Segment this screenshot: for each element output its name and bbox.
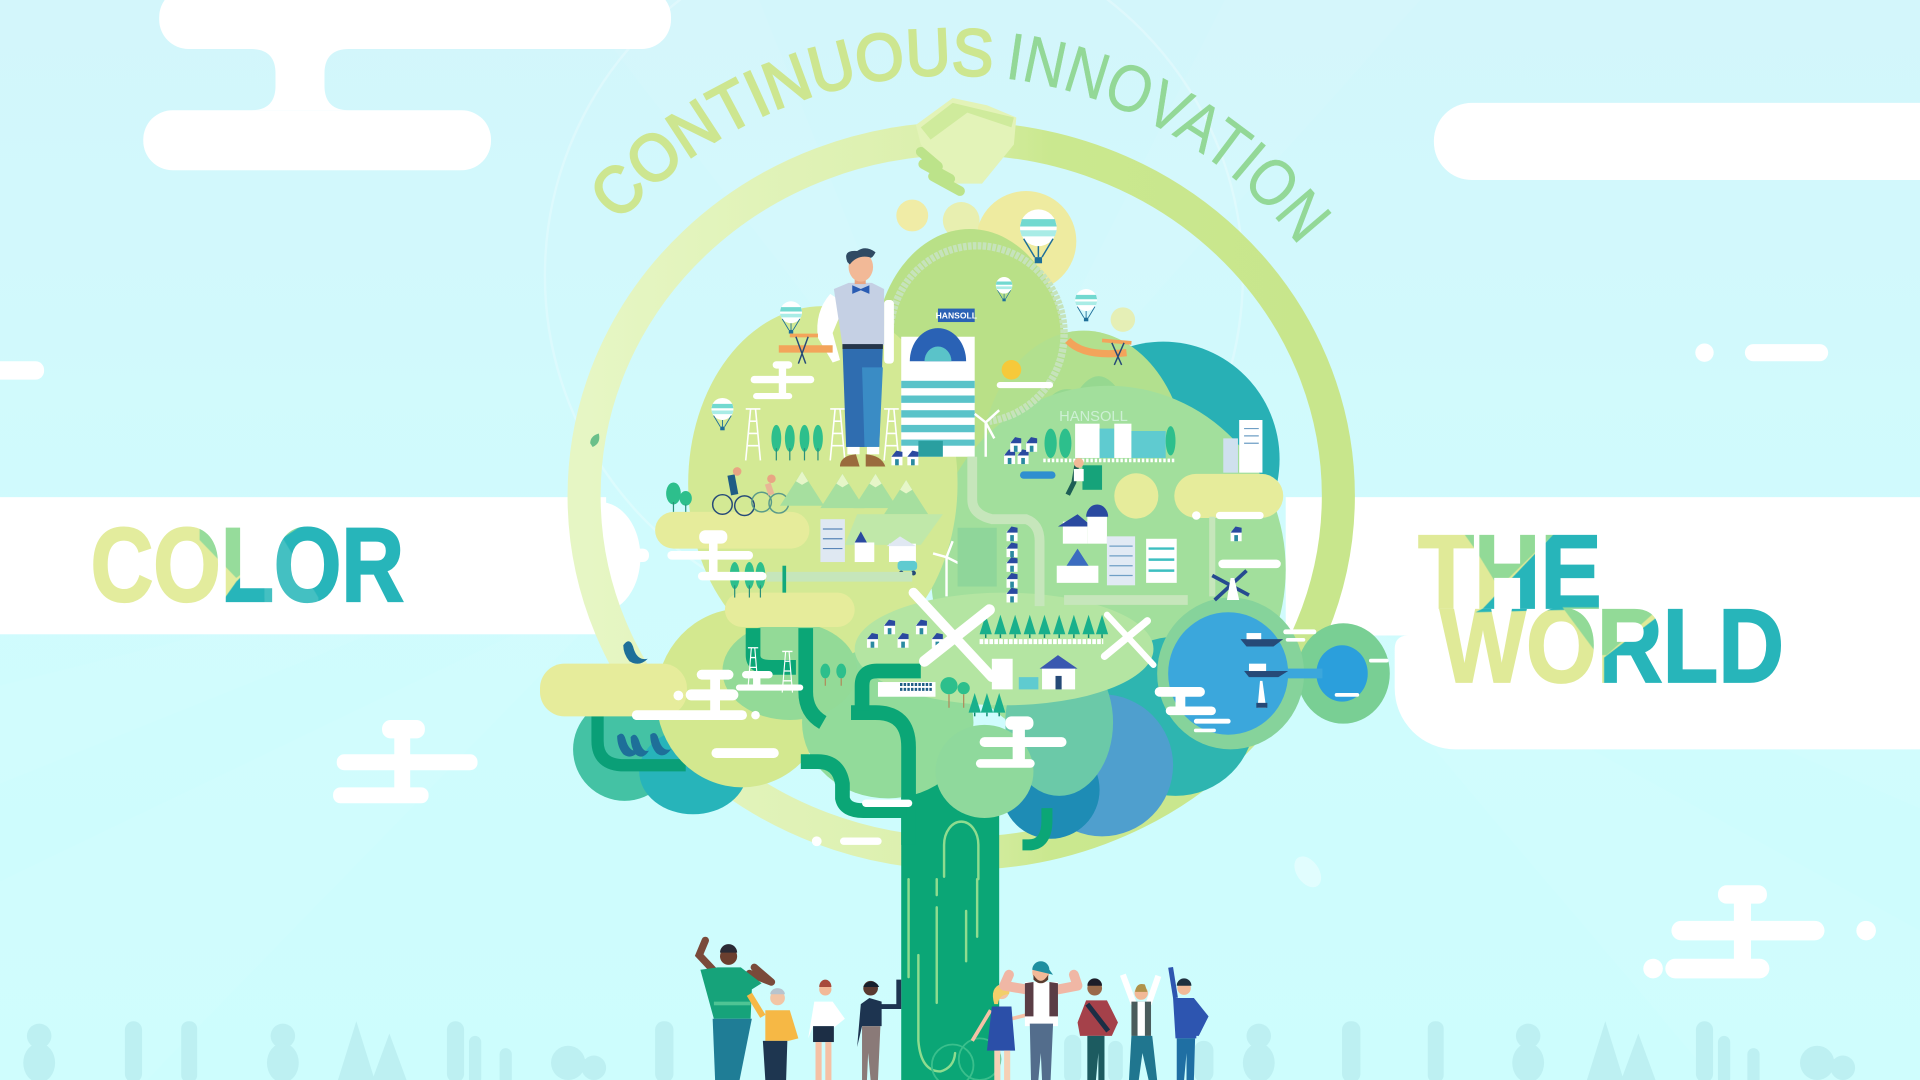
front green lobe [936, 725, 1033, 818]
wind turbines [933, 410, 999, 596]
car [898, 561, 917, 576]
cloud: lower right [1643, 885, 1876, 978]
blue pond [1020, 471, 1056, 479]
icon: handshake [916, 98, 1016, 191]
curved title: continuous innovation [594, 28, 1332, 243]
central right green mass [931, 386, 1286, 753]
sky circles [896, 191, 1135, 332]
pine forest [969, 615, 1108, 716]
road ring [890, 246, 1064, 421]
lower blue lobes [1002, 637, 1255, 839]
factory with hansoll sign [1043, 409, 1176, 460]
mountains [780, 471, 928, 514]
cloud: top left [143, 0, 671, 170]
balloons [711, 209, 1097, 430]
white band right [1286, 497, 1920, 749]
icon: hansoll tower: HANSOLL [936, 310, 977, 320]
person: woman with dark top [857, 980, 899, 1080]
small houses [867, 437, 1242, 648]
title: THE WORLD [1418, 514, 1784, 705]
person on bench [1068, 458, 1102, 495]
lower centre lobes [802, 647, 1113, 798]
mid left lobe [722, 622, 857, 720]
creatures in lobe [617, 733, 671, 757]
mansion and houses [992, 655, 1078, 689]
roads [767, 457, 1212, 606]
lower towers [748, 648, 792, 693]
branches [753, 628, 1047, 845]
factory low [878, 682, 936, 697]
person: man in red jacket [1078, 978, 1118, 1080]
icon: towers [746, 409, 899, 460]
curved title: continuous innovation: INNOVATION [1010, 34, 1332, 243]
ship and lighthouse [1240, 633, 1288, 708]
title: COLOR: COLOR [91, 507, 404, 624]
white fence [980, 640, 1103, 644]
person: woman in blue dress [972, 984, 1031, 1080]
tree trunk [901, 784, 1000, 1080]
creature on ring [623, 641, 648, 664]
lower left pale lobe [656, 609, 828, 787]
peach hill [707, 365, 824, 492]
ring of cooperation [584, 138, 1338, 853]
teal hill [1047, 342, 1280, 577]
white canopy clouds [632, 360, 1389, 846]
icon: hansoll tower [901, 309, 977, 457]
buildings group left [820, 519, 916, 562]
person: man arms raised [1123, 975, 1158, 1080]
right hill [980, 331, 1188, 612]
person: man in blue jacket [1171, 967, 1209, 1080]
windmill [1212, 571, 1249, 600]
pale yellow foliage [540, 473, 1283, 716]
distant forest silhouettes [23, 1021, 1855, 1080]
central pale lobe [855, 593, 1153, 705]
factory with hansoll sign: HANSOLL [1059, 409, 1128, 425]
lake [1157, 598, 1390, 749]
people group [699, 940, 1209, 1080]
cloud: small right [1695, 343, 1828, 362]
white band left [0, 497, 649, 634]
character: man in bow tie [817, 248, 894, 467]
round trees near cyclists [666, 482, 692, 512]
faint sparkle [1289, 851, 1327, 892]
title: THE WORLD: THE [1418, 514, 1602, 631]
white airplanes [913, 593, 1153, 677]
icon: orange biplanes [779, 336, 1131, 365]
left hill [688, 306, 958, 661]
cyclists [713, 467, 789, 516]
far left lobes [573, 698, 747, 814]
cloud: lower left [333, 720, 478, 803]
leaf [590, 433, 599, 447]
city buildings [1223, 420, 1262, 473]
person: strongman with bandana [1004, 961, 1078, 1080]
icon: row of trees [771, 425, 823, 460]
person: older man in yellow [749, 988, 798, 1080]
curved title: continuous innovation: CONTINUOUS [594, 28, 992, 214]
cloud: top right [1434, 103, 1920, 180]
crop field [958, 528, 997, 587]
top hill [874, 229, 1065, 481]
cloud: small left [0, 361, 44, 380]
farm fields [845, 514, 943, 545]
person: man in green sweater [699, 940, 771, 1080]
person: woman in white [808, 980, 845, 1080]
round trees [820, 664, 970, 708]
title: THE WORLD: WORLD [1440, 588, 1784, 705]
faint halo ring [545, 0, 1243, 624]
small trees left [730, 562, 786, 598]
tree canopy [540, 191, 1390, 846]
city buildings right [1057, 504, 1177, 585]
